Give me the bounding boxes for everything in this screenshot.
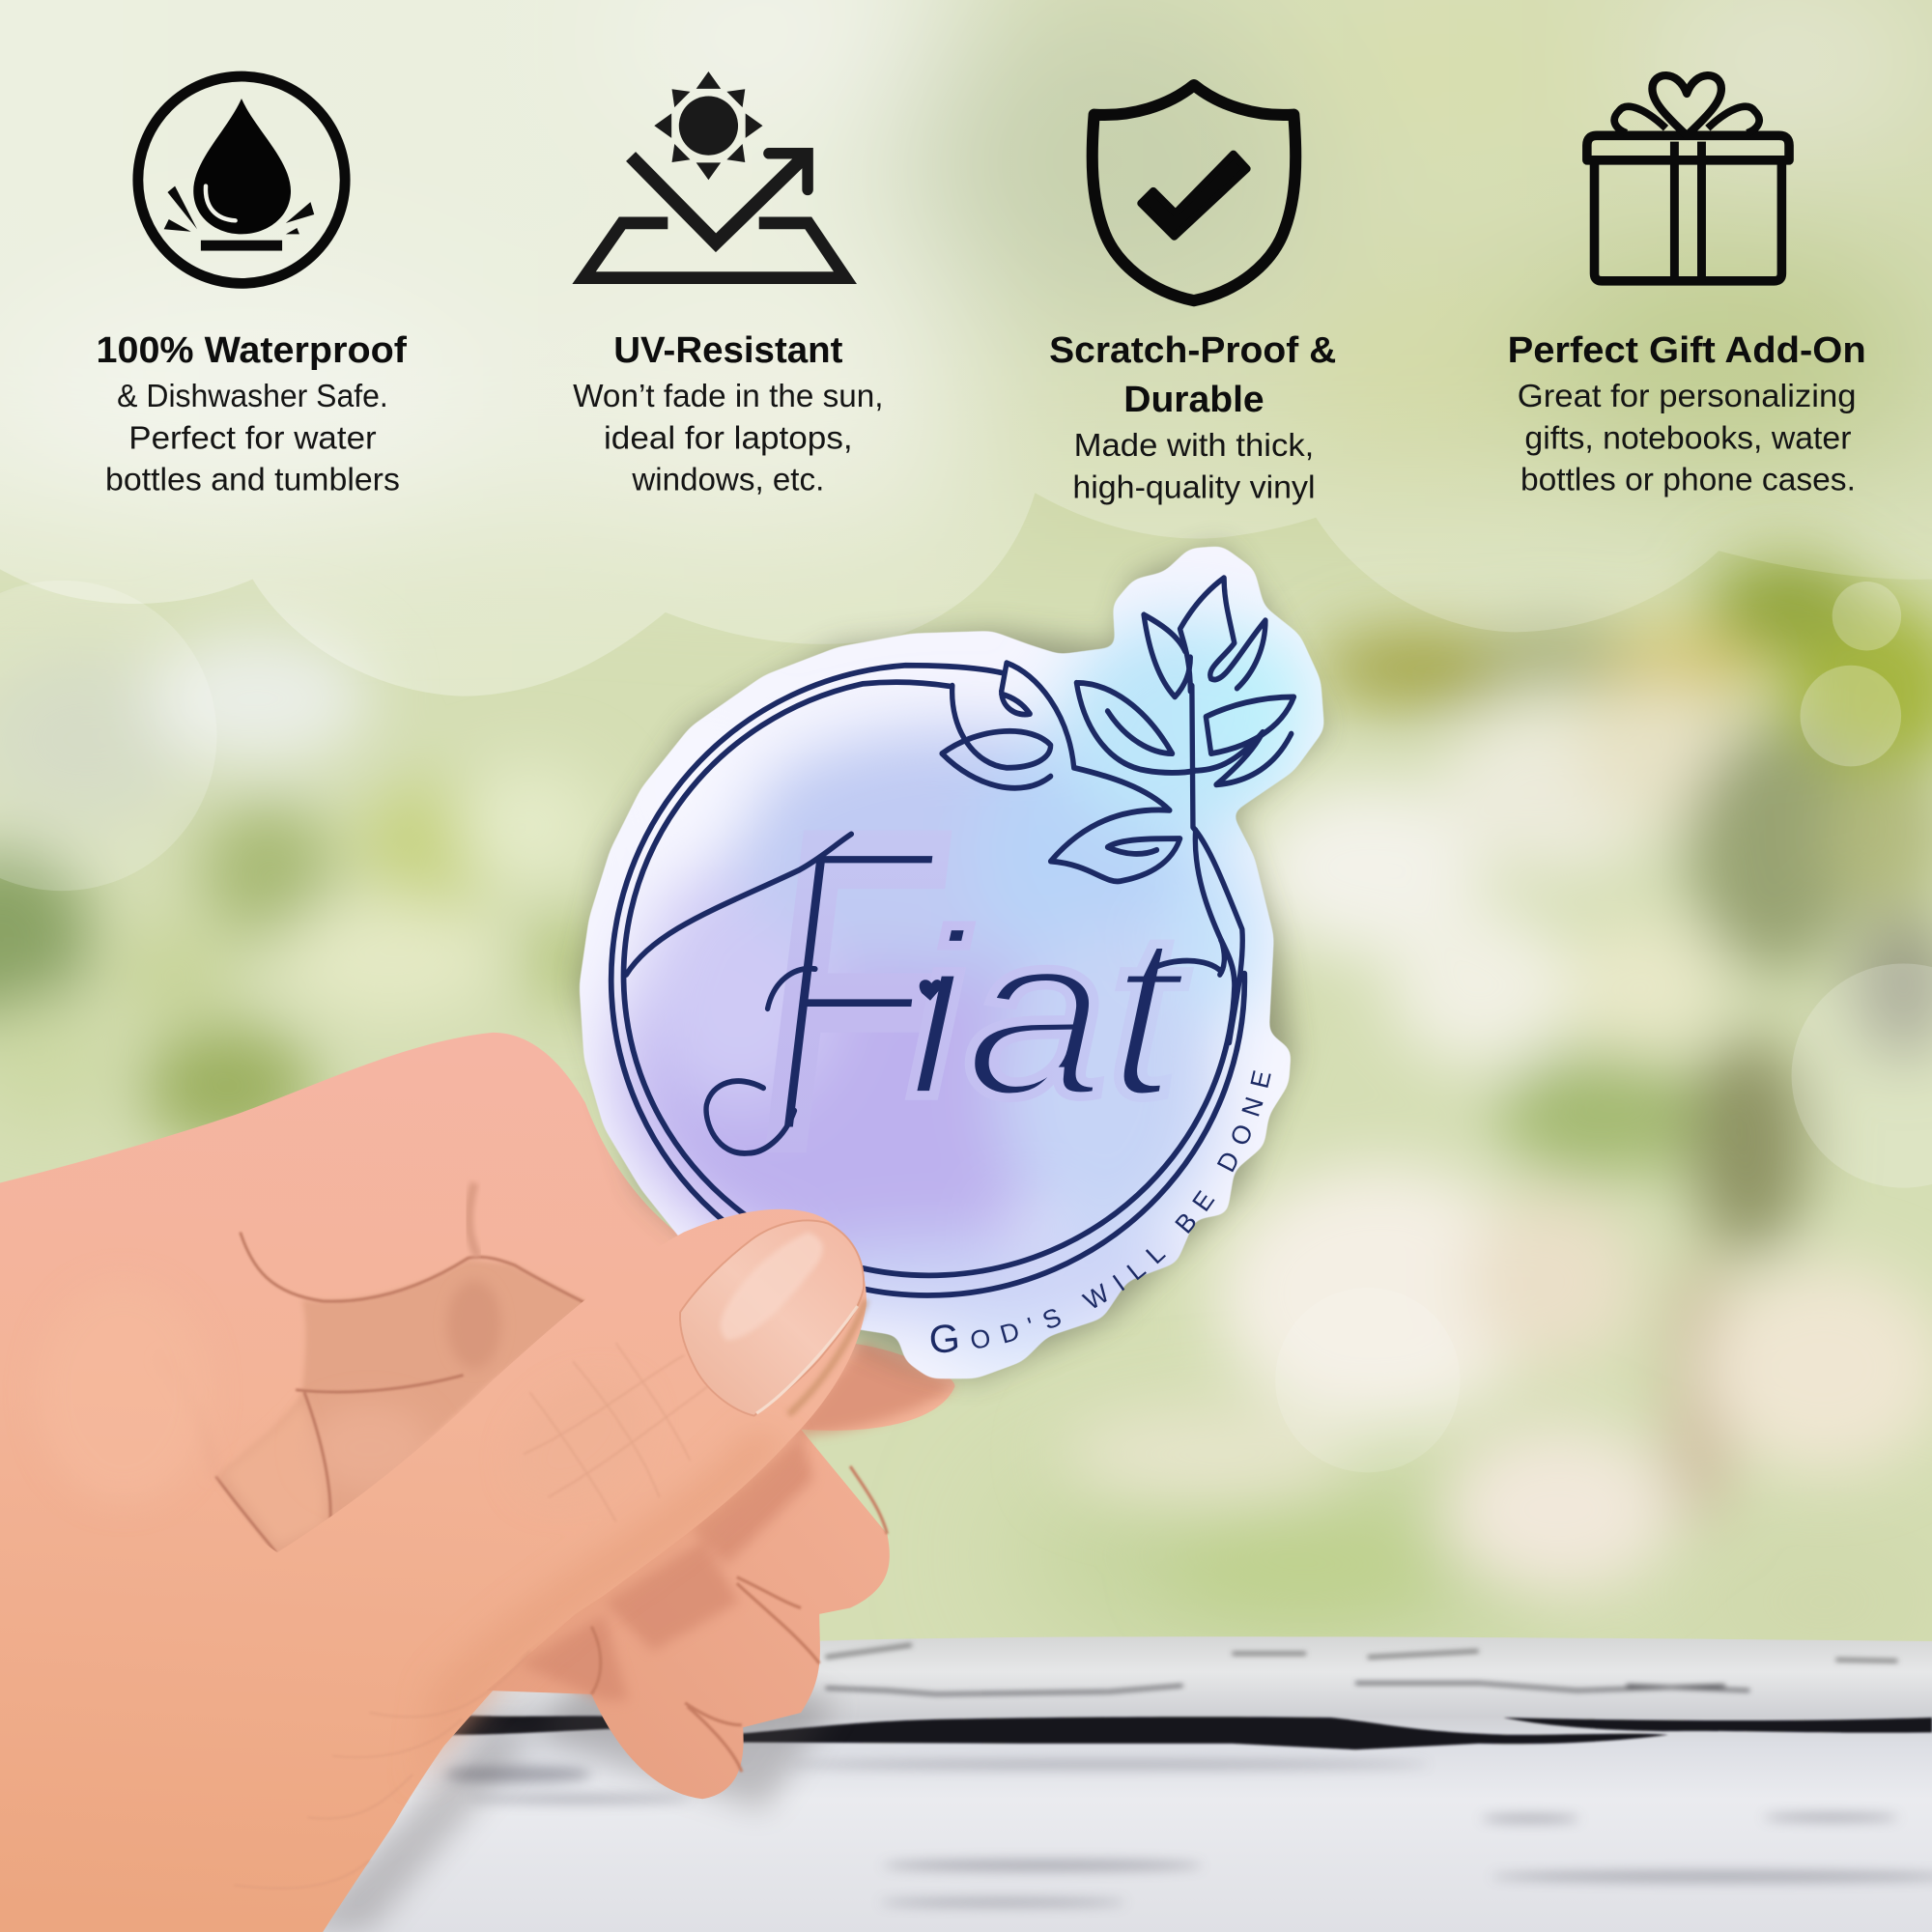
thumb shading [37,1282,788,1786]
hand: thumb [0,1209,867,1932]
ring, leaves and swash line art [611,578,1293,1295]
decorative bokeh circles [0,581,1932,1472]
left greens [0,653,197,826]
right side mottling [1316,629,1525,707]
wooden table [308,1636,1932,1932]
body text [1072,428,1316,505]
heading: 100% Waterproof [96,329,407,371]
finger shadows [518,1343,955,1700]
sticker [566,535,1333,1391]
icon: gift box [1587,75,1789,281]
wood cracks and streaks [826,1645,1897,1694]
hand: back fingers [0,1033,955,1932]
feature: waterproof [96,76,407,498]
tagline: God's will be done: GOD'S WILL BE DONE [931,1070,1271,1352]
body text: gifts, notebooks, water [1524,420,1851,456]
feature: gift add-on [1508,75,1866,498]
nail shine [721,1233,867,1414]
heading: Durable [1123,379,1264,420]
letter F: F [766,750,946,1232]
fold highlights and creases [160,1182,586,1552]
body text: & Dishwasher Safe. [117,379,388,414]
body text: windows, etc. [631,463,824,498]
heading: UV-Resistant [613,329,843,371]
feature: UV-resistant [573,71,884,498]
body text: Great for personalizing [1518,379,1857,414]
lettering: Fiat [766,750,1188,1232]
body text: bottles or phone cases. [1520,463,1856,498]
thumb skin wrinkles [234,1343,708,1889]
body text: high-quality vinyl [1072,469,1316,505]
feature: scratch-proof [1049,85,1336,505]
heading: Scratch-Proof & [1049,329,1336,371]
icon: sun and reflection arrow [584,71,845,278]
hand silhouette [0,1033,955,1932]
heading [1049,329,1336,420]
inner fold between fingers [215,1260,589,1555]
finger creases [591,1466,887,1772]
body text: bottles and tumblers [105,463,400,498]
heading: Perfect Gift Add-On [1508,329,1866,371]
body text: ideal for laptops, [604,420,853,456]
body text: Perfect for water [128,420,377,456]
body text: Won’t fade in the sun, [573,379,884,414]
letters iat: iat [907,883,1188,1145]
cloud overlay [0,0,1932,696]
body text: Made with thick, [1074,428,1314,464]
body text [105,379,400,498]
lower fingers [487,1430,890,1799]
body text [1518,379,1857,498]
body text [573,379,884,498]
icon: small heart on the crossbar [920,980,942,1001]
icon: water drop [138,76,345,283]
icon: shield with check [1093,85,1295,300]
thumb nail [680,1220,864,1416]
sticker shadow [579,546,1324,1378]
plank crack [451,1716,1932,1749]
sticker die-cut body with watercolor [580,547,1324,1379]
